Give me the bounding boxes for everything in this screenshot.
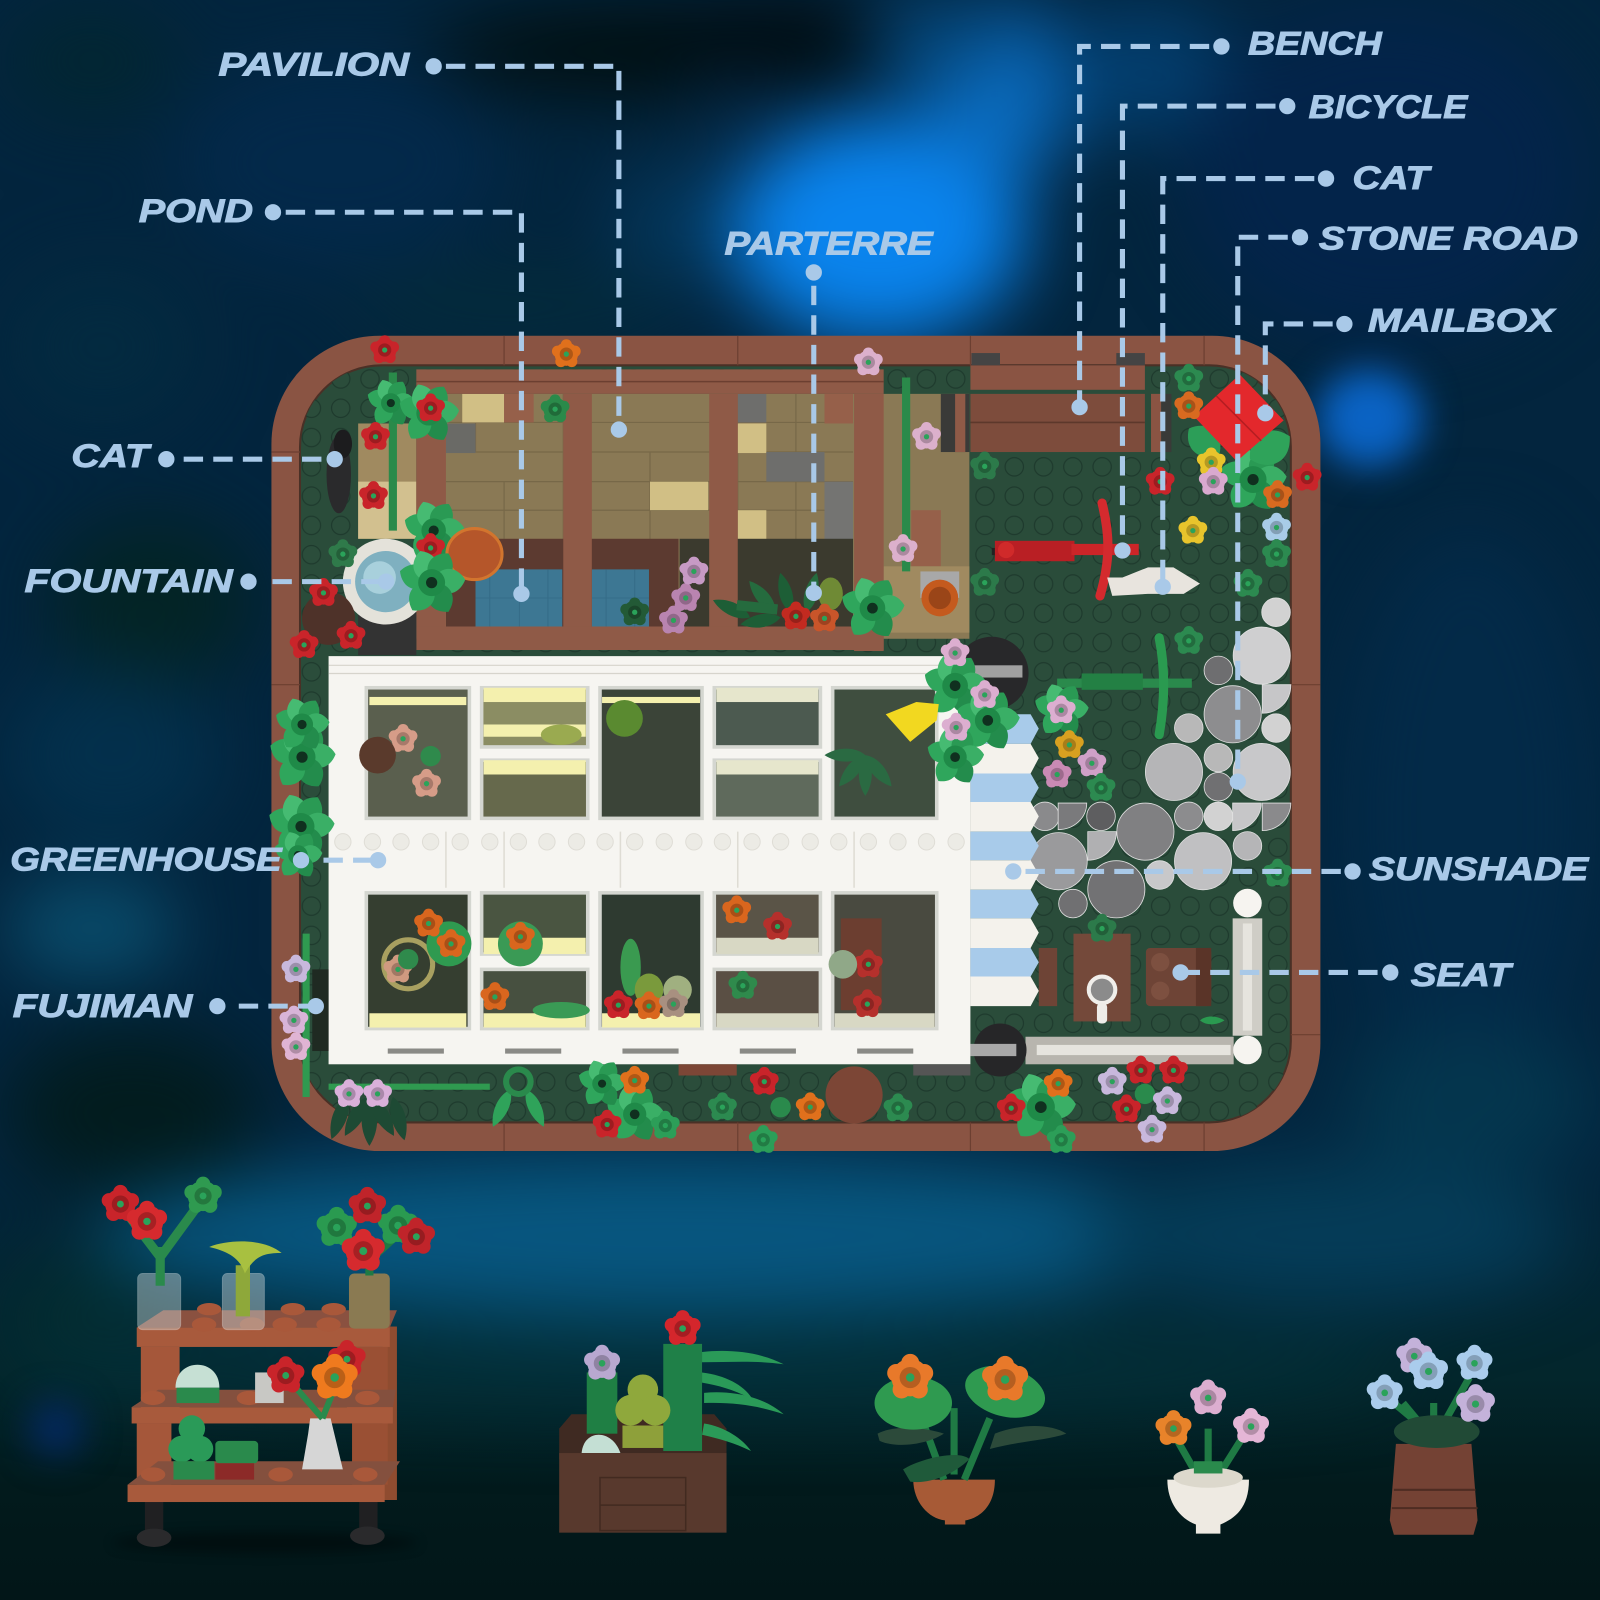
product: orange flower pot bbox=[874, 1354, 1066, 1524]
pavilion floor bbox=[358, 394, 969, 639]
label: MAILBOX bbox=[1257, 302, 1557, 421]
foliage: left edge bbox=[265, 695, 337, 1097]
seat bbox=[1039, 934, 1211, 1023]
label: BENCH bbox=[1071, 25, 1383, 415]
cat: black bbox=[327, 430, 352, 513]
label: CAT (right) bbox=[1155, 159, 1433, 595]
label: FUJIMAN bbox=[13, 987, 324, 1024]
foliage: greenhouse corner bbox=[886, 637, 1292, 942]
product: blue flower barrel bbox=[1367, 1338, 1495, 1535]
product: crate planter bbox=[559, 1310, 784, 1533]
product: white bowl pot bbox=[1155, 1379, 1269, 1534]
greenhouse roof studs bbox=[335, 834, 964, 850]
stone road bbox=[1030, 598, 1291, 918]
label: BENCH: BENCH bbox=[1248, 25, 1383, 62]
label: CAT (right): CAT bbox=[1353, 159, 1433, 196]
label: PAVILION bbox=[218, 46, 627, 438]
shelf: vases and flowers bbox=[102, 1177, 435, 1480]
label: BICYCLE bbox=[1114, 88, 1469, 559]
foliage: top-left vines and flowers bbox=[290, 335, 959, 658]
label: PAVILION: PAVILION bbox=[218, 46, 411, 83]
label: PARTERRE: PARTERRE bbox=[724, 225, 934, 262]
mailbox and foliage bbox=[970, 364, 1322, 654]
bicycle: green bbox=[1057, 638, 1192, 735]
parterre plants bbox=[620, 557, 843, 633]
fence and lamp posts bbox=[970, 889, 1262, 1077]
bicycle: red bbox=[992, 503, 1139, 596]
plants behind windows bbox=[359, 700, 897, 1019]
sunshade bbox=[970, 714, 1039, 1006]
label: CAT (left) bbox=[71, 437, 343, 474]
baseplate board bbox=[271, 336, 1320, 1151]
label: GREENHOUSE: GREENHOUSE bbox=[10, 840, 283, 877]
label: STONE ROAD bbox=[1230, 219, 1578, 790]
bench bbox=[970, 353, 1171, 452]
leader lines and dots bbox=[10, 25, 1590, 1024]
label: FOUNTAIN bbox=[24, 562, 394, 599]
label: SEAT bbox=[1172, 956, 1514, 993]
label: STONE ROAD: STONE ROAD bbox=[1319, 219, 1578, 256]
cat: white bbox=[1107, 567, 1200, 596]
label: BICYCLE: BICYCLE bbox=[1309, 88, 1469, 125]
orange bucket bbox=[920, 571, 959, 616]
greenhouse windows: lower row bbox=[366, 893, 937, 1029]
label: POND: POND bbox=[139, 192, 253, 229]
panel: greenhouse bbox=[329, 656, 970, 1076]
label: PARTERRE bbox=[724, 225, 934, 601]
label: POND bbox=[139, 192, 530, 602]
label: FUJIMAN: FUJIMAN bbox=[13, 987, 194, 1024]
greenhouse windows: upper row bbox=[366, 688, 937, 818]
fountain bbox=[343, 539, 429, 655]
shelf studs bbox=[141, 1303, 380, 1482]
foliage: bottom edge bbox=[325, 1056, 1188, 1153]
label: CAT (left): CAT bbox=[71, 437, 153, 474]
pond bbox=[476, 569, 649, 627]
label: FOUNTAIN: FOUNTAIN bbox=[24, 562, 234, 599]
label: SUNSHADE: SUNSHADE bbox=[1369, 850, 1590, 887]
pavilion beams bbox=[416, 369, 884, 651]
label: MAILBOX: MAILBOX bbox=[1368, 302, 1557, 339]
label: GREENHOUSE bbox=[10, 840, 386, 877]
panel: pavilion bbox=[358, 369, 969, 651]
product: flower shelf bbox=[102, 1177, 435, 1553]
label: SEAT: SEAT bbox=[1411, 956, 1514, 993]
label: SUNSHADE bbox=[1005, 850, 1590, 887]
window light strips bbox=[369, 688, 935, 1028]
